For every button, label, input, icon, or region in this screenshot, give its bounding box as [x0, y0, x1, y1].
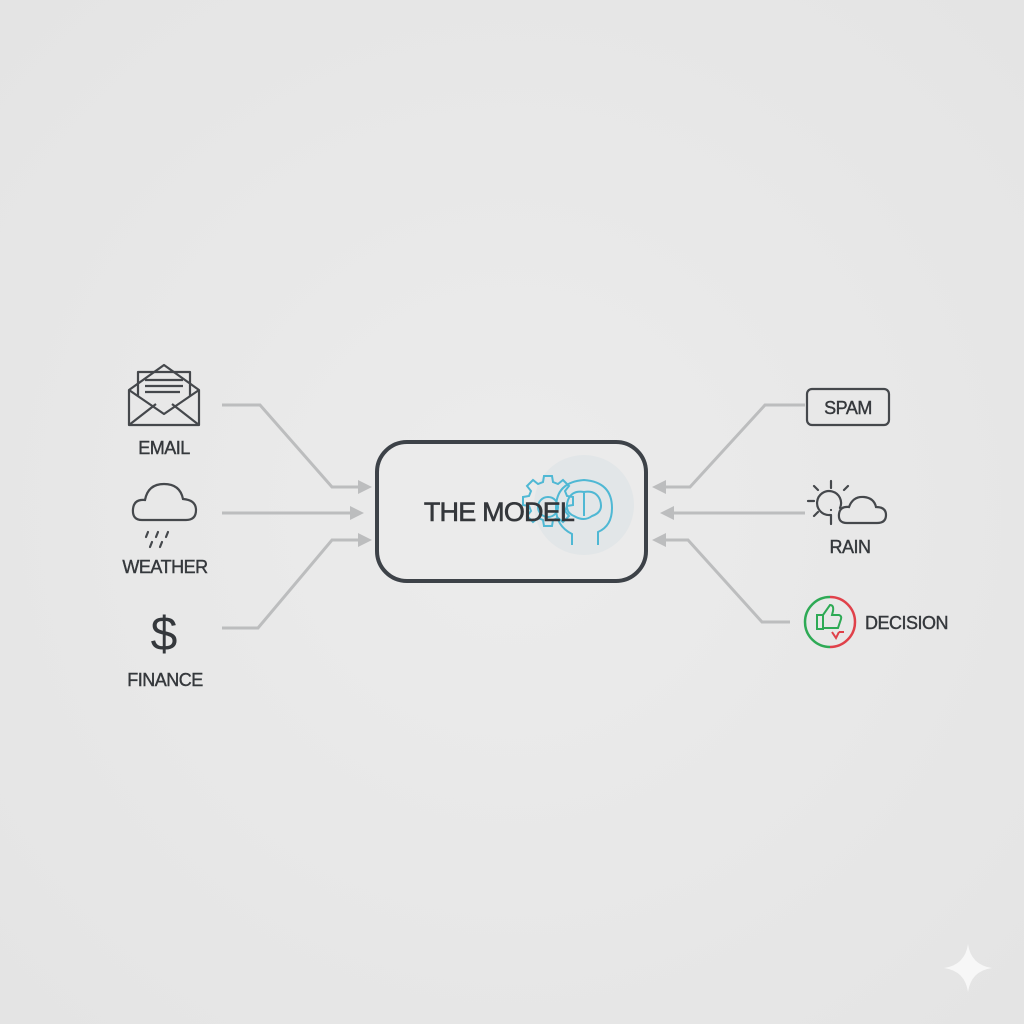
label: email: EMAIL: [138, 438, 190, 458]
icon: sparkle: [944, 944, 992, 992]
icon: email: [129, 365, 199, 425]
label: decision: DECISION: [865, 613, 948, 633]
icon: gear brain: [523, 476, 612, 545]
icon: sun cloud: [808, 481, 886, 524]
label: rain: RAIN: [829, 537, 871, 557]
output: spam: [807, 389, 889, 425]
icon: dollar: $: [151, 608, 177, 661]
output: spam: SPAM: [824, 398, 872, 418]
title: the model: THE MODEL: [424, 497, 575, 527]
label: weather: WEATHER: [122, 557, 208, 577]
icon: weather: [133, 484, 196, 547]
icon: decision: [805, 597, 855, 647]
model box: [377, 442, 646, 581]
arrows: inputs: [222, 405, 805, 628]
label: finance: FINANCE: [127, 670, 203, 690]
